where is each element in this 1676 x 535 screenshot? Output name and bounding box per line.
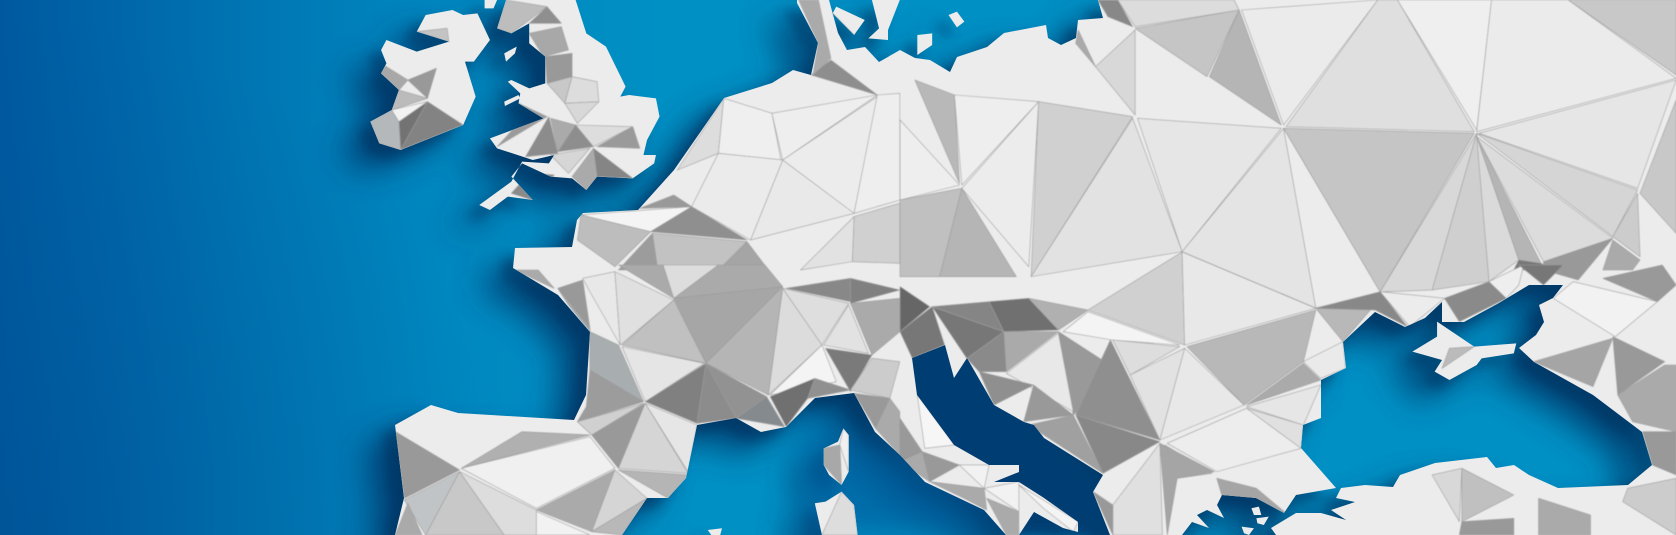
facets: Alps, Balkans, Italy, Turkey and Caucasus [900,252,1676,535]
facets: grey low-poly triangles of the map [370,0,1676,535]
facets: France and Iberia [395,265,900,535]
land: white paper base silhouette of Europe [370,0,1676,535]
facets: central and eastern Europe north [900,0,1676,308]
facets: Ireland, Britain and northern France [370,0,900,270]
shadow: soft cast shadow of the land on the sea [340,10,1664,535]
